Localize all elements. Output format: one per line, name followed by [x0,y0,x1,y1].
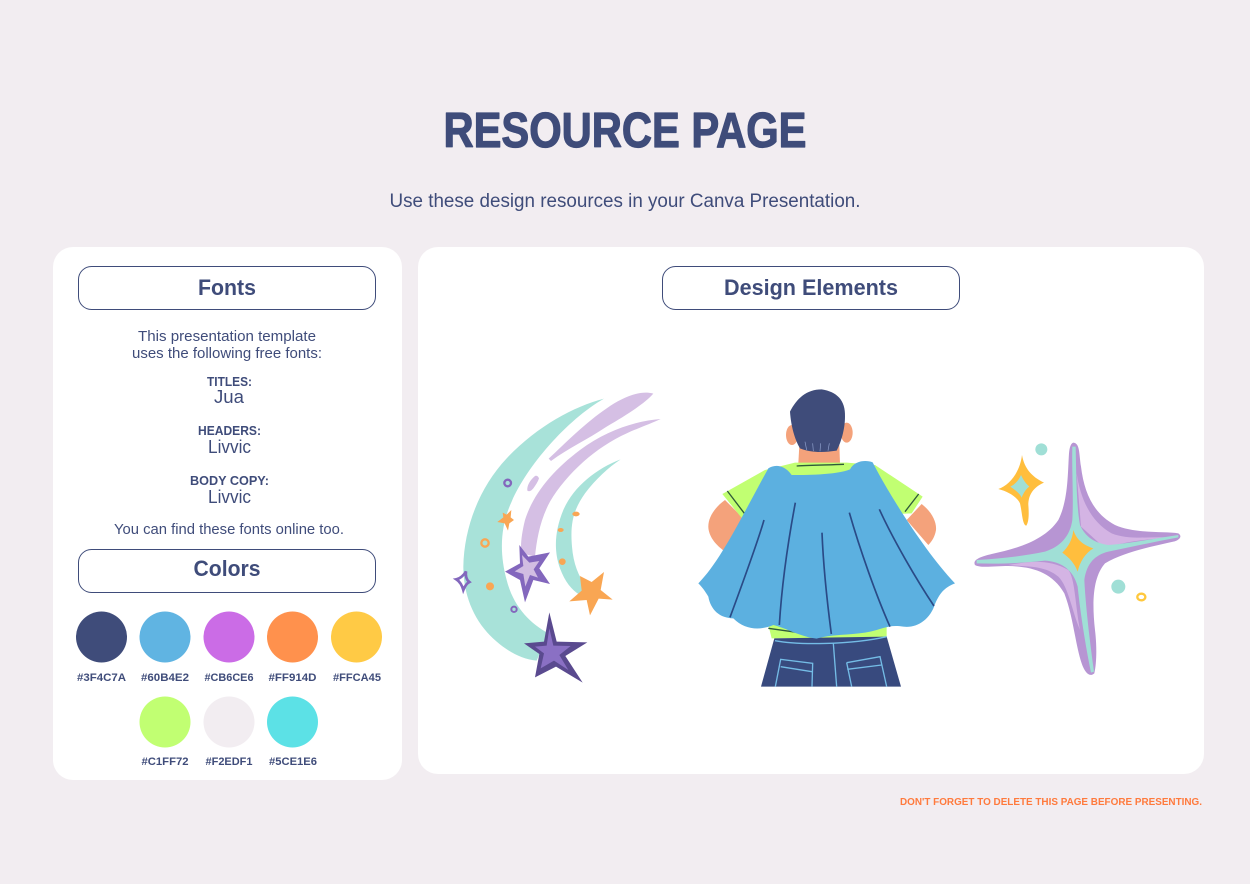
text block: titles font: Jua [214,387,245,407]
text block: font intro: This presentation template [138,328,316,345]
heading: fonts [78,266,376,310]
teal cross [977,447,1178,673]
small sparkle [998,455,1044,526]
heading: design elements [662,266,960,310]
text block: body copy font: Livvic [208,487,251,507]
swatch: F2EDF1 [204,696,254,768]
star: orange [569,572,613,615]
swatch: 60B4E2 [140,612,190,684]
swatch: FFCA45: #FFCA45 [333,672,381,684]
swatch: 60B4E2: #60B4E2 [141,672,189,684]
star: violet [505,545,550,602]
illustration: sparkle stars [974,443,1180,675]
swatch: C1FF72 [140,696,190,768]
panel: fonts and colors [53,247,402,780]
light lobes [1077,473,1167,548]
text block: font note: You can find these fonts online too. [114,521,344,538]
swatch: FFCA45 [331,612,382,684]
swatch: CB6CE6 [204,612,254,684]
heading: design elements: Design Elements [724,275,898,300]
swatch: CB6CE6: #CB6CE6 [204,672,254,684]
panel: design elements [418,247,1204,774]
sparkle: small violet [456,571,469,590]
footer note: DON'T FORGET TO DELETE THIS PAGE BEFORE PRESENTING. [900,797,1202,808]
heading: fonts: Fonts [198,275,256,300]
text block: headers font [198,423,261,457]
swatch: 5CE1E6 [267,696,318,768]
subtitle: Use these design resources in your Canva Presentation. [390,191,860,212]
big sparkle [974,443,1180,675]
dots [1035,443,1047,455]
text block: font intro [132,328,322,362]
text block: titles font: TITLES: [207,374,252,389]
shirt [722,463,923,520]
swatch: FF914D: #FF914D [268,672,317,684]
text block: headers font: Livvic [208,437,251,457]
swatch: C1FF72: #C1FF72 [142,756,188,768]
text block: body copy font [190,473,269,507]
star: small orange [497,510,514,531]
swatch: 3F4C7A [76,612,127,684]
swatch: 5CE1E6: #5CE1E6 [269,756,317,768]
arms [708,423,936,552]
text block: headers font: HEADERS: [198,423,261,438]
heading: colors [78,550,376,592]
star: dark purple [524,612,587,683]
cape folds [730,503,934,634]
jeans [761,637,901,687]
shirt seams [727,464,919,632]
text block: titles font [207,374,252,407]
heading: colors: Colors [194,556,260,581]
swatch: FF914D [267,612,318,684]
swatch: F2EDF1: #F2EDF1 [206,756,252,768]
illustration: shooting stars [456,393,661,683]
text block: body copy font: BODY COPY: [190,473,269,488]
title: RESOURCE PAGE [444,104,806,158]
cape [698,461,955,639]
hair [790,389,845,452]
text block: font intro: uses the following free fonts: [132,345,322,362]
center diamond [1062,530,1093,572]
illustration: man with cape [698,389,955,687]
swatch: 3F4C7A: #3F4C7A [77,672,126,684]
